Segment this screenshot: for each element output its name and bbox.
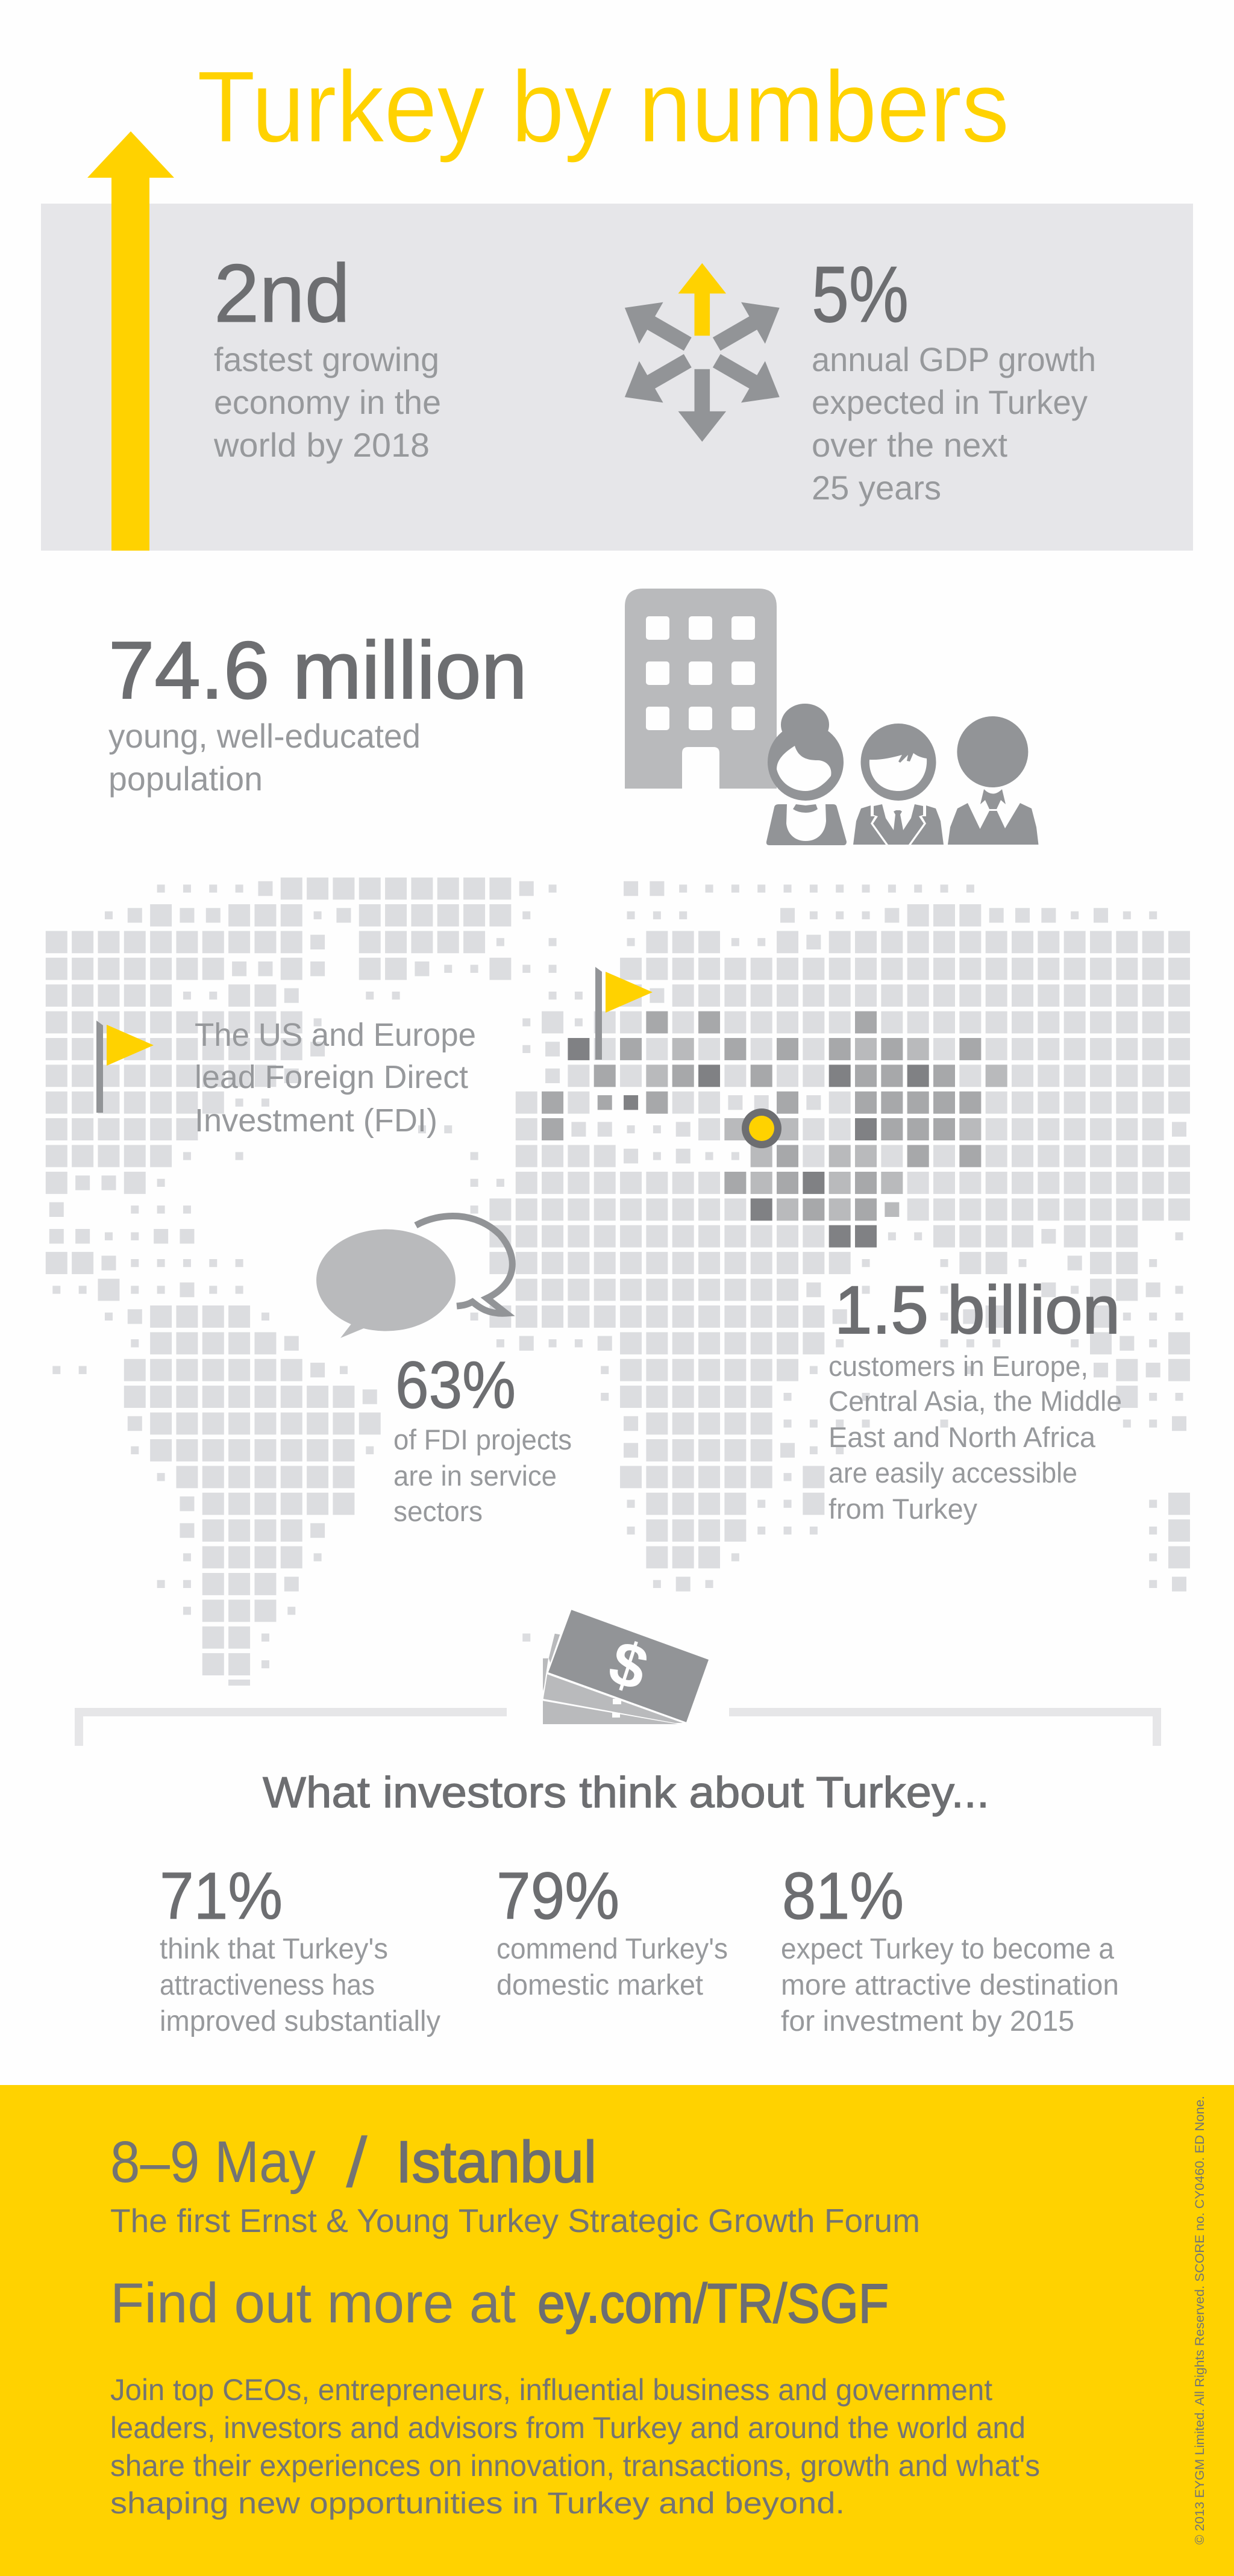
stat: 2nd fastest growing economy: fastest growing	[214, 340, 439, 378]
footer: forum name: The first Ernst & Young Turkey Strategic Growth Forum	[110, 2202, 920, 2239]
stat: 5% annual GDP growth: 25 years	[812, 469, 941, 507]
text: US and Europe lead FDI: Investment (FDI)	[195, 1102, 437, 1139]
icon: man with suit	[948, 716, 1039, 845]
stat: 71%	[160, 1859, 440, 2037]
stat: 1.5 billion customers: from Turkey	[828, 1493, 977, 1525]
stat: 71%: improved substantially	[160, 2005, 440, 2037]
icon: office building	[625, 589, 777, 789]
stat: 2nd fastest growing economy: 2nd	[214, 248, 350, 340]
stat: 74.6 million population	[108, 625, 527, 798]
map: dark medium cell	[624, 1102, 650, 1103]
map: lighter highlighted cells around Turkey	[646, 1049, 1012, 1210]
stat: 71%: attractiveness has	[160, 1969, 375, 2001]
text: US and Europe lead FDI	[195, 1017, 476, 1139]
map: medium highlighted cells small squares	[598, 1102, 624, 1103]
stat: 2nd fastest growing economy: economy in the	[214, 383, 441, 421]
stat: 79%: commend Turkey's	[496, 1933, 728, 1965]
map: light medium cell	[885, 1209, 911, 1210]
flag: US	[96, 1021, 154, 1113]
map: clipped bottom cell	[228, 1680, 250, 1686]
footer: description paragraph	[110, 2373, 1040, 2520]
stat: 1.5 billion customers: Central Asia, the Middle	[828, 1385, 1122, 1417]
footer: date and location: 8–9 May	[110, 2129, 316, 2195]
map: large land cells	[46, 889, 1194, 1665]
stat: 71%: 71%	[160, 1859, 283, 1933]
stat: 63% of FDI projects: sectors	[393, 1495, 483, 1527]
stat: 79%: domestic market	[496, 1969, 703, 2001]
footer: call to action: Find out more at	[110, 2271, 516, 2334]
bracket: investors section	[79, 1712, 1157, 1746]
footer: description paragraph: leaders, investors and advisors from Turkey and around the world and	[110, 2411, 1026, 2445]
stat: 63% of FDI projects: are in service	[393, 1460, 557, 1492]
stat: 1.5 billion customers: 1.5 billion	[835, 1272, 1120, 1348]
world map: dotted grey grid	[46, 889, 1201, 1686]
map: small land cells	[52, 889, 1201, 1665]
stat: 2nd fastest growing economy: world by 2018	[213, 426, 430, 464]
stat: 5% annual GDP growth: expected in Turkey	[812, 383, 1088, 421]
footer: date and location: Istanbul	[396, 2129, 597, 2195]
icon: speech bubbles	[316, 1216, 512, 1338]
stat: 1.5 billion customers: customers in Europe,	[828, 1350, 1088, 1382]
footer: description paragraph: share their experiences on innovation, transactions, growth and what's	[110, 2449, 1040, 2483]
footer: call to action	[110, 2271, 889, 2334]
stat: 2nd fastest growing economy	[213, 248, 441, 464]
map pin: Turkey	[742, 1108, 781, 1148]
stat: 74.6 million population: population	[108, 760, 263, 798]
flag: Europe	[595, 967, 653, 1060]
footer: description paragraph: Join top CEOs, entrepreneurs, influential business and government	[110, 2373, 992, 2407]
stat: 5% annual GDP growth	[812, 250, 1096, 507]
stat: 79%: 79%	[496, 1859, 619, 1933]
icon: six arrows radiating	[613, 263, 792, 442]
stat: 63% of FDI projects: of FDI projects	[393, 1424, 572, 1455]
map: darkest highlighted cells	[568, 1049, 933, 1236]
stat: 63% of FDI projects: 63%	[395, 1348, 516, 1422]
heading: what investors think: What investors think about Turkey...	[263, 1769, 989, 1817]
stat: 5% annual GDP growth: annual GDP growth	[812, 340, 1096, 378]
stat: 74.6 million population: young, well-educated	[108, 717, 421, 755]
panel: growth summary	[41, 204, 1193, 551]
stat: 5% annual GDP growth: over the next	[812, 426, 1007, 464]
stat: 81%: 81%	[782, 1859, 904, 1933]
icon: large yellow up arrow	[87, 131, 174, 551]
stat: 81%: more attractive destination	[781, 1969, 1119, 2001]
stat: 71%: think that Turkey's	[160, 1933, 388, 1965]
stat: 81%: for investment by 2015	[781, 2005, 1074, 2037]
map: medium land cells	[49, 889, 1198, 1584]
footer: description paragraph: shaping new opportunities in Turkey and beyond.	[110, 2486, 845, 2520]
icon: businesswoman	[766, 704, 847, 845]
stat: 81%: expect Turkey to become a	[781, 1933, 1114, 1965]
footer: date and location: /	[346, 2123, 368, 2202]
stat: 1.5 billion customers: East and North Africa	[828, 1421, 1096, 1453]
text: US and Europe lead FDI: The US and Europe	[195, 1017, 476, 1053]
stat: 74.6 million population: 74.6 million	[108, 625, 527, 716]
title: Turkey by numbers	[197, 50, 1009, 163]
icon: man with fringe and tie	[853, 724, 944, 845]
footer: copyright vertical: © 2013 EYGM Limited. All Rights Reserved. SCORE no. CY0460. ED None.	[1193, 2096, 1207, 2545]
stat: 79%	[496, 1859, 728, 2001]
stat: 81%	[781, 1859, 1119, 2037]
icon: stack of money	[543, 1610, 709, 1724]
stat: 1.5 billion customers: are easily accessible	[828, 1457, 1077, 1489]
text: US and Europe lead FDI: lead Foreign Direct	[195, 1059, 468, 1095]
footer: date and location	[110, 2123, 597, 2202]
icon: stack of money: $	[601, 1627, 656, 1704]
footer: call to action: ey.com/TR/SGF	[537, 2273, 889, 2334]
stat: 1.5 billion customers	[828, 1272, 1122, 1525]
map: medium highlighted cells	[542, 1022, 986, 1210]
stat: 5% annual GDP growth: 5%	[812, 250, 909, 339]
panel: yellow footer	[0, 2085, 1234, 2576]
stat: 63% of FDI projects	[393, 1348, 572, 1527]
